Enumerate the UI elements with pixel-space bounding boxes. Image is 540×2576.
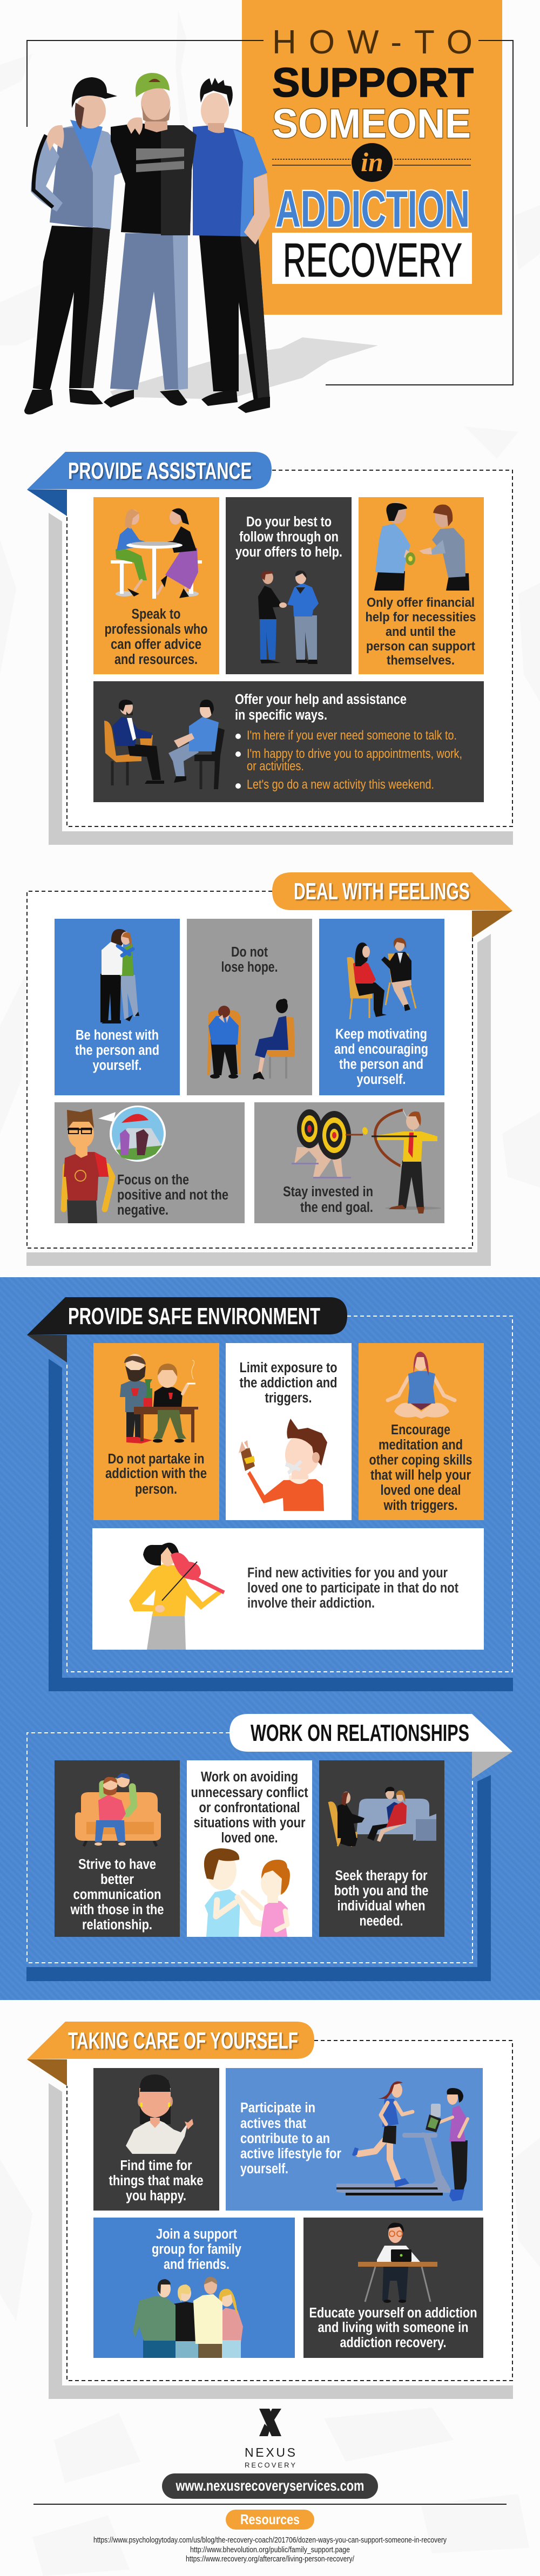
resource links: http://www.bhevolution.org/public/family_support.page <box>190 2545 350 2554</box>
text: Educate yourself on addiction <box>309 2306 477 2321</box>
text: Join a support <box>156 2227 237 2242</box>
text: the person and <box>75 1043 159 1058</box>
dashed frame <box>27 1733 473 1963</box>
header frame lines <box>27 40 513 385</box>
text: both you and the <box>334 1883 429 1899</box>
title: HOW-TO <box>272 24 473 61</box>
text: Do not <box>231 945 268 960</box>
text: positive and not the <box>117 1188 228 1203</box>
text: that will help your <box>370 1468 471 1483</box>
text: Focus on the <box>117 1172 189 1188</box>
text: your offers to help. <box>235 545 342 560</box>
text: Offer your help and assistance <box>235 692 407 707</box>
offset shadow <box>49 513 513 845</box>
text <box>191 1770 308 1846</box>
heading ribbon <box>27 2022 314 2086</box>
card: educate yourself <box>303 2218 483 2358</box>
resources pill: Resources <box>240 2511 300 2527</box>
illustration: three friends <box>24 73 270 415</box>
text: meditation and <box>379 1438 463 1453</box>
text: you happy. <box>126 2188 186 2204</box>
offset shadow <box>26 1775 491 1981</box>
heading ribbon <box>230 1714 512 1779</box>
text: loved one to participate in that do not <box>247 1581 458 1596</box>
text: Do your best to <box>246 514 332 530</box>
text <box>247 1565 458 1611</box>
text: with those in the <box>70 1902 164 1917</box>
offset shadow <box>26 934 491 1266</box>
icon: offering money <box>374 502 469 591</box>
card: meditation <box>359 1343 484 1520</box>
icon: boy and girl talking <box>204 1848 290 1937</box>
text <box>105 1452 207 1497</box>
card: financial help <box>359 497 484 674</box>
text: the person and <box>339 1057 423 1072</box>
text: group for family <box>152 2242 242 2257</box>
text <box>117 1172 228 1218</box>
white panel <box>67 2041 512 2381</box>
card: limit exposure <box>226 1343 352 1520</box>
text: loved one. <box>221 1831 278 1846</box>
card: support group <box>93 2218 295 2358</box>
text: communication <box>73 1887 161 1902</box>
text: Limit exposure to <box>240 1360 337 1375</box>
text <box>152 2227 242 2272</box>
text: and living with someone in <box>318 2320 469 2335</box>
title: in <box>361 147 383 177</box>
text <box>221 945 278 975</box>
logo: nexus recovery <box>245 2409 295 2469</box>
text: Be honest with <box>76 1028 159 1043</box>
text <box>369 1422 472 1513</box>
text: and friends. <box>164 2257 230 2272</box>
icon: counselling session <box>207 999 295 1080</box>
card: keep motivating <box>319 919 444 1095</box>
text: themselves. <box>387 653 455 668</box>
text: in specific ways. <box>235 708 327 723</box>
text <box>334 1027 428 1087</box>
text <box>240 2100 341 2177</box>
text: Participate in <box>240 2100 315 2116</box>
text: Keep motivating <box>335 1027 427 1042</box>
text <box>105 607 207 667</box>
card: specific ways <box>93 681 484 802</box>
icon: two women at a table <box>111 509 202 599</box>
text: lose hope. <box>221 960 278 975</box>
text: individual when <box>337 1899 426 1914</box>
text: follow through on <box>239 530 339 545</box>
text: unnecessary conflict <box>191 1785 308 1800</box>
text <box>235 692 462 792</box>
blue band background <box>0 1277 540 2000</box>
text: Seek therapy for <box>335 1868 428 1883</box>
text: yourself. <box>356 1072 406 1087</box>
text: Encourage <box>391 1422 450 1438</box>
text: Find new activities for you and your <box>247 1565 448 1581</box>
icon: man refusing cigarettes <box>239 1419 327 1511</box>
text <box>70 1857 164 1933</box>
offset shadow <box>49 2083 513 2399</box>
text: relationship. <box>82 1917 152 1933</box>
text: contribute to an <box>240 2131 330 2146</box>
text: situations with your <box>193 1815 306 1831</box>
text: I'm here if you ever need someone to talk to. <box>247 728 457 743</box>
text: or confrontational <box>199 1800 300 1815</box>
card: be honest <box>55 919 180 1095</box>
text: Find time for <box>120 2158 192 2173</box>
section: deal with feelings <box>26 872 512 1266</box>
card: focus on the positive <box>55 1102 245 1223</box>
text: the end goal. <box>300 1200 373 1215</box>
text: and resources. <box>114 652 198 667</box>
card: find time <box>93 2068 219 2211</box>
text <box>309 2306 477 2350</box>
resource links <box>93 2536 447 2564</box>
text: involve their addiction. <box>247 1596 375 1611</box>
text: actives that <box>240 2116 306 2131</box>
text: Speak to <box>132 607 180 622</box>
card: avoid conflict <box>187 1760 312 1937</box>
section: provide assistance <box>27 452 513 845</box>
text: Let's go do a new activity this weekend. <box>247 777 434 792</box>
icon: archer and targets <box>292 1109 441 1214</box>
text <box>334 1868 429 1929</box>
white panel <box>67 470 512 826</box>
card: do not lose hope <box>187 919 312 1095</box>
text: yourself. <box>93 1058 141 1073</box>
title: SOMEONE <box>272 101 471 147</box>
icon: two men drinking and smoking <box>120 1354 198 1443</box>
text: addiction recovery. <box>340 2335 446 2350</box>
text <box>109 2158 203 2204</box>
text: person. <box>135 1482 177 1497</box>
card: stay invested <box>254 1102 444 1223</box>
text: addiction with the <box>105 1466 207 1481</box>
icon: woman with ok gesture <box>126 2075 193 2154</box>
card: seek therapy <box>319 1760 444 1937</box>
website pill <box>162 2473 378 2499</box>
logo: nexus recovery: NEXUS <box>245 2445 295 2459</box>
text: Work on avoiding <box>201 1770 298 1785</box>
text: or activities. <box>247 759 304 774</box>
text <box>365 595 476 668</box>
icon: hugging couple <box>100 929 139 1023</box>
text: yourself. <box>240 2161 288 2177</box>
text: and until the <box>386 625 456 639</box>
logo: nexus recovery: RECOVERY <box>245 2461 295 2469</box>
text: Strive to have <box>78 1857 156 1872</box>
card: do not partake <box>93 1343 219 1520</box>
icon: two people seated talking <box>104 700 225 789</box>
text: can offer advice <box>111 637 201 652</box>
heading ribbon <box>27 452 272 516</box>
text <box>283 1184 373 1215</box>
icon: woman on treadmill with trainer <box>336 2082 469 2201</box>
text: needed. <box>360 1914 403 1929</box>
text: with triggers. <box>383 1498 458 1513</box>
text: professionals who <box>105 622 207 637</box>
text: help for necessities <box>365 610 476 625</box>
icon: couple therapy <box>328 1787 436 1846</box>
heading ribbon <box>272 872 512 938</box>
heading ribbon: PROVIDE SAFE ENVIRONMENT <box>68 1303 320 1330</box>
text: Do not partake in <box>108 1452 204 1467</box>
text: the addiction and <box>240 1375 337 1391</box>
text: things that make <box>109 2173 203 2188</box>
text: triggers. <box>265 1391 312 1406</box>
resource links: https://www.recovery.org/aftercare/living-person-recovery/ <box>186 2554 355 2564</box>
card: active lifestyle <box>226 2068 483 2211</box>
icon: group of friends <box>133 2277 243 2358</box>
text: Only offer financial <box>367 595 475 610</box>
icon: handshake <box>258 571 319 664</box>
title: SUPPORT <box>272 60 474 106</box>
text: active lifestyle for <box>240 2146 341 2161</box>
website pill: www.nexusrecoveryservices.com <box>176 2477 364 2494</box>
dashed frame <box>67 2041 512 2381</box>
section: provide safe environment <box>27 1297 513 1691</box>
icon: woman playing violin <box>129 1543 224 1650</box>
icon: man at desk with laptop <box>358 2223 437 2303</box>
text: and encouraging <box>334 1042 428 1057</box>
resource links: https://www.psychologytoday.com/us/blog/the-recovery-coach/201706/dozen-ways-you-can-support-someone-in-recovery <box>93 2536 447 2545</box>
heading ribbon <box>27 1297 347 1362</box>
text: I'm happy to drive you to appointments, work, <box>247 747 462 761</box>
text: negative. <box>117 1203 168 1218</box>
text <box>240 1360 337 1406</box>
card: better communication <box>55 1760 180 1937</box>
text: Stay invested in <box>283 1184 373 1199</box>
title panel background <box>242 0 502 315</box>
text: other coping skills <box>369 1453 472 1468</box>
footer <box>33 2409 507 2564</box>
header <box>24 0 513 415</box>
section: work on relationships <box>26 1714 512 1981</box>
dashed frame <box>67 470 512 826</box>
text: better <box>100 1872 134 1887</box>
dashed frame <box>67 1316 512 1672</box>
card: speak to professionals <box>93 497 219 674</box>
heading ribbon: TAKING CARE OF YOURSELF <box>68 2028 298 2054</box>
heading ribbon: PROVIDE ASSISTANCE <box>68 458 252 484</box>
card: follow through <box>226 497 352 674</box>
text: loved one deal <box>380 1483 461 1498</box>
icon: meditating woman <box>388 1352 455 1419</box>
title <box>272 24 474 287</box>
offset shadow <box>49 1359 513 1691</box>
text <box>235 514 342 560</box>
icon: couple on a couch <box>75 1773 161 1846</box>
icon: man imagining a happy family <box>64 1106 166 1223</box>
card: find new activities <box>92 1528 484 1650</box>
floor shadow <box>110 337 378 399</box>
dashed frame <box>27 891 473 1248</box>
resources pill <box>226 2510 314 2530</box>
text <box>75 1028 159 1073</box>
white panel <box>27 891 473 1248</box>
icon: two women in chairs <box>348 938 416 1019</box>
text: person can support <box>366 639 475 654</box>
section: taking care of yourself <box>27 2022 513 2399</box>
